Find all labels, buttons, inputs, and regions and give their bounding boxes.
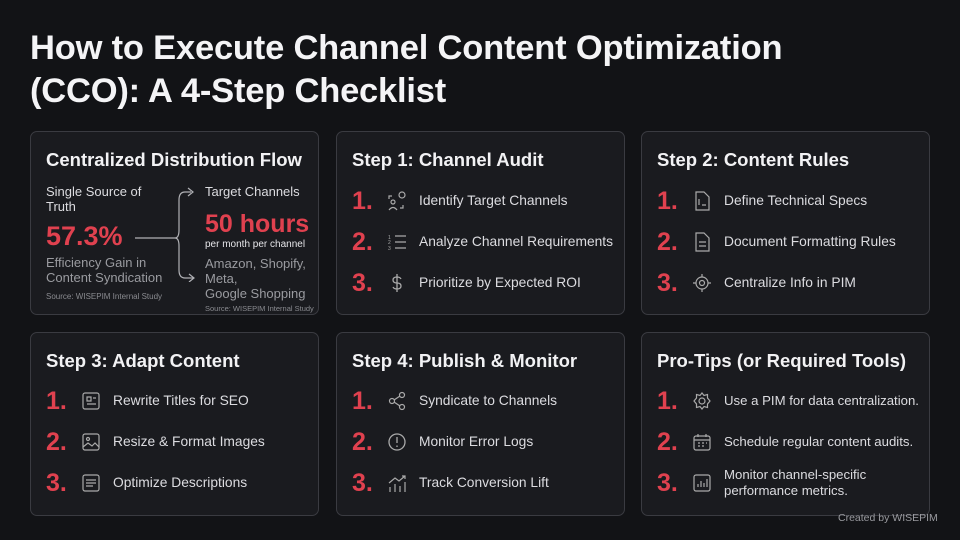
panel: pro-tips: Pro-Tips (or Required Tools) [657,350,906,371]
text: channels list: Google Shopping [205,286,305,301]
text: per month: per month per channel [205,239,305,250]
text: single source [46,184,142,214]
stat: 50 hours: 50 hours [205,210,309,238]
text: efficiency [46,255,162,285]
text: single source: Single Source of [46,184,141,199]
item 1: Identify Target Channels [419,193,568,208]
item 1: Define Technical Specs [724,193,867,208]
item 3: 3. [46,469,67,497]
item 1 [46,387,249,415]
item 3 [46,469,247,497]
title: How to Execute Channel Content Optimization [30,29,782,67]
title [30,29,782,110]
panel: step 4: Step 4: Publish & Monitor [352,350,577,371]
item 1: Syndicate to Channels [419,393,557,408]
item 3: 3. [657,469,678,497]
item 2: Document Formatting Rules [724,234,896,249]
item 3: 3. [352,469,373,497]
text: target channels: Target Channels [205,184,300,199]
item 3 [657,467,866,498]
item 2: 2 [388,240,391,246]
item 1: Use a PIM for data centralization. [724,393,919,408]
item 3: Monitor channel-specific [724,467,866,482]
item 1: Rewrite Titles for SEO [113,393,249,408]
item 1 [352,387,557,415]
item 3: 3. [657,269,678,297]
panel: step 1 [336,131,625,315]
item 3 [352,469,549,497]
item 2: 2. [657,428,678,456]
text: efficiency: Efficiency Gain in [46,255,146,270]
item 1: 1. [352,187,373,215]
panel: pro-tips [641,332,930,516]
item 2 [657,228,896,256]
item 2: 3 [388,246,391,252]
text: channels list [205,256,306,301]
item 2 [46,428,265,456]
panel: step 2 [641,131,930,315]
text: channels list: Amazon, Shopify, [205,256,306,271]
item 3 [657,269,856,297]
footer credit: Created by WISEPIM [838,512,938,524]
source left: Source: WISEPIM Internal Study [46,292,162,301]
panel: centralized distribution flow: Centralized Distribution Flow [46,149,302,170]
item 2: Schedule regular content audits. [724,434,913,449]
item 1: 1. [352,387,373,415]
item 2: 2. [657,228,678,256]
item 2 [657,428,913,456]
item 3: Prioritize by Expected ROI [419,275,581,290]
item 3: Optimize Descriptions [113,475,247,490]
item 2: 1 [388,235,391,241]
text: single source: Truth [46,199,76,214]
arrow: branching [135,188,195,282]
item 1: 1. [657,387,678,415]
source right: Source: WISEPIM Internal Study [205,304,314,313]
item 3 [352,269,581,297]
item 1: 1. [657,187,678,215]
item 2: 2. [352,428,373,456]
item 2: 2. [352,228,373,256]
panel: step 1: Step 1: Channel Audit [352,149,544,170]
item 2: Resize & Format Images [113,434,265,449]
item 2 [352,228,613,256]
item 1: 1. [46,387,67,415]
panel: step 3: Step 3: Adapt Content [46,350,240,371]
item 3: performance metrics. [724,483,848,498]
item 2: Monitor Error Logs [419,434,533,449]
panel: centralized distribution flow [30,131,319,315]
text: channels list: Meta, [205,271,238,286]
item 2: Analyze Channel Requirements [419,234,613,249]
item 3: Centralize Info in PIM [724,275,856,290]
title: (CCO): A 4-Step Checklist [30,72,446,110]
item 2: 2. [46,428,67,456]
item 3: 3. [352,269,373,297]
item 1 [657,387,919,415]
item 3: Track Conversion Lift [419,475,549,490]
item 1 [657,187,867,215]
panel: step 4 [336,332,625,516]
panel: step 3 [30,332,319,516]
stat: 57.3%: 57.3% [46,221,123,251]
panel: step 2: Step 2: Content Rules [657,149,849,170]
text: efficiency: Content Syndication [46,270,162,285]
item 1 [352,187,568,215]
item 2 [352,428,533,456]
